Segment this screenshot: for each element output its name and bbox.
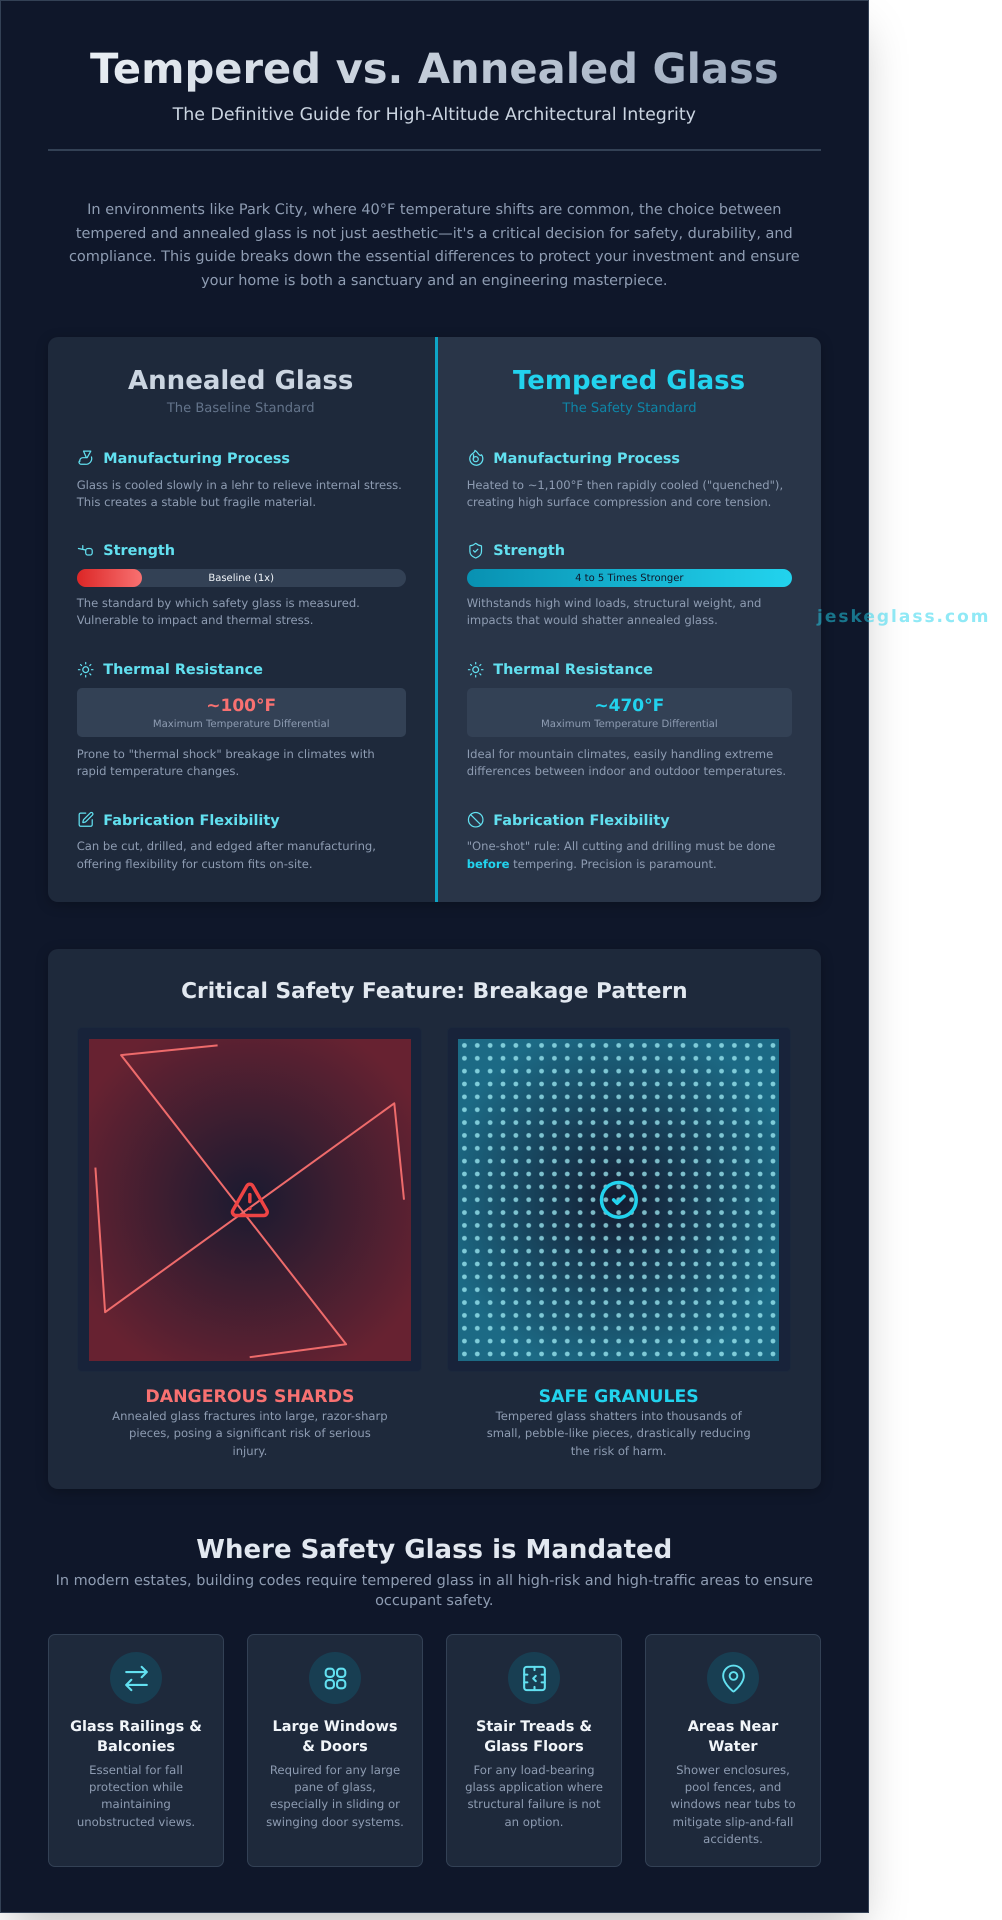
description: [467, 839, 775, 871]
description: differences between indoor and outdoor temperatures.: [467, 764, 786, 778]
strength bar: [467, 569, 792, 587]
card: stairs: [446, 1634, 622, 1867]
icon: edit: [78, 812, 94, 827]
description: safe granules: Tempered glass shatters into thousands of: [496, 1409, 742, 1423]
description: impacts that would shatter annealed glass.: [467, 613, 718, 627]
row: strength: [76, 543, 406, 627]
description: Ideal for mountain climates, easily handling extreme: [467, 747, 773, 761]
icon: scale: [78, 545, 93, 556]
description: safe granules: the risk of harm.: [571, 1444, 667, 1458]
card title: [476, 1719, 592, 1755]
text: mandate intro: occupant safety.: [375, 1593, 494, 1609]
card text: mitigate slip-and-fall: [673, 1815, 793, 1829]
description: [467, 747, 786, 778]
row: thermal resistance: [77, 662, 406, 778]
card text: [77, 1763, 195, 1829]
row: fabrication flexibility: [467, 812, 775, 871]
heading: breakage pattern: Critical Safety Feature: Breakage Pattern: [181, 979, 688, 1004]
subtitle: The Definitive Guide for High-Altitude Architectural Integrity: [173, 105, 696, 125]
card text: Required for any large: [270, 1763, 400, 1777]
card title: Balconies: [97, 1739, 175, 1755]
stat caption: Maximum Temperature Differential: [541, 719, 718, 730]
card text: protection while: [89, 1780, 183, 1794]
description: [467, 596, 761, 627]
icon: ban: [468, 812, 484, 828]
intro paragraph: compliance. This guide breaks down the essential differences to protect your investment and ensure: [69, 249, 800, 265]
description: dangerous shards: pieces, posing a significant risk of serious: [129, 1426, 371, 1440]
card text: unobstructed views.: [77, 1815, 195, 1829]
card text: pane of glass,: [294, 1780, 376, 1794]
caption: dangerous shards: DANGEROUS SHARDS: [145, 1387, 354, 1407]
label: Manufacturing Process: [103, 451, 290, 467]
icon: cooling: [78, 450, 92, 465]
icon: sun: [468, 662, 484, 678]
card text: glass application where: [465, 1780, 603, 1794]
description: dangerous shards: Annealed glass fractures into large, razor-sharp: [112, 1409, 388, 1423]
stat caption: Maximum Temperature Differential: [153, 719, 330, 730]
diagram: dangerous shards: [77, 1027, 422, 1372]
card: railings: [48, 1634, 224, 1867]
panel: comparison: [48, 337, 821, 902]
card text: maintaining: [101, 1797, 171, 1811]
label: Strength: [493, 543, 565, 559]
shard visual: [89, 1039, 411, 1361]
column: tempered glass: [435, 337, 821, 902]
description: safe granules: [487, 1409, 751, 1458]
description: Prone to "thermal shock" breakage in climates with: [77, 747, 375, 761]
subheading: baseline standard: The Baseline Standard: [167, 401, 315, 416]
label: Fabrication Flexibility: [493, 813, 670, 829]
diagram: safe granules: [447, 1027, 791, 1372]
icon: shield check: [469, 542, 482, 558]
icon: sun: [78, 662, 94, 678]
description: rapid temperature changes.: [77, 764, 239, 778]
subheading: safety standard: The Safety Standard: [562, 401, 697, 416]
icon: warning triangle: [230, 1182, 269, 1218]
card: water: [645, 1634, 821, 1867]
description: Heated to ~1,100°F then rapidly cooled ("quenched"),: [467, 478, 783, 492]
dot grid: [462, 1043, 776, 1356]
description: Vulnerable to impact and thermal stress.: [77, 613, 313, 627]
description: [77, 747, 375, 778]
description: Glass is cooled slowly in a lehr to relieve internal stress.: [77, 478, 402, 492]
description: Withstands high wind loads, structural weight, and: [467, 596, 761, 610]
description: [76, 596, 360, 627]
card text: pool fences, and: [685, 1780, 781, 1794]
stat value: ~470°F: [594, 696, 664, 716]
strength bar: [77, 569, 406, 587]
card title: Stair Treads &: [476, 1719, 592, 1735]
caption: safe granules: SAFE GRANULES: [539, 1387, 699, 1407]
description: offering flexibility for custom fits on-site.: [77, 857, 313, 871]
icon: map pin: [707, 1652, 759, 1704]
icon: grid: [309, 1652, 361, 1704]
heading: tempered glass: Tempered Glass: [513, 366, 745, 396]
row: fabrication flexibility: [77, 812, 376, 871]
description: dangerous shards: injury.: [232, 1444, 267, 1458]
description: creating high surface compression and core tension.: [467, 495, 771, 509]
row: manufacturing process: [467, 450, 783, 509]
row: thermal resistance: [467, 662, 792, 778]
column: annealed glass: [48, 337, 435, 902]
description: "One-shot" rule: All cutting and drilling must be done: [467, 839, 775, 853]
text: mandate intro: In modern estates, building codes require tempered glass in all high-risk and high-traffic areas to ensure: [56, 1573, 813, 1589]
description: Can be cut, drilled, and edged after manufacturing,: [77, 839, 376, 853]
label: Thermal Resistance: [103, 662, 263, 678]
bar fill: [77, 569, 142, 587]
intro paragraph: your home is both a sanctuary and an engineering masterpiece.: [201, 273, 668, 289]
intro paragraph: tempered and annealed glass is not just aesthetic—it's a critical decision for safety, durability, and: [76, 226, 793, 242]
stat value: ~100°F: [206, 696, 276, 716]
card title: Glass Floors: [484, 1739, 584, 1755]
panel: breakage pattern: [48, 949, 821, 1489]
icon: arrows: [110, 1652, 162, 1704]
description: [76, 478, 402, 509]
stat box: [77, 688, 406, 737]
row: manufacturing process: [76, 450, 402, 509]
description: dangerous shards: [112, 1409, 388, 1458]
description: This creates a stable but fragile material.: [77, 495, 316, 509]
row: strength: [467, 542, 792, 627]
intro paragraph: In environments like Park City, where 40°F temperature shifts are common, the choice between: [87, 202, 781, 218]
card title: Glass Railings &: [70, 1719, 202, 1735]
granule visual: [458, 1039, 779, 1361]
card title: [70, 1719, 202, 1755]
card text: especially in sliding or: [270, 1797, 400, 1811]
card text: [266, 1763, 404, 1829]
card text: Essential for fall: [89, 1763, 183, 1777]
card title: & Doors: [302, 1739, 368, 1755]
card text: For any load-bearing: [473, 1763, 595, 1777]
text: mandate intro: [56, 1573, 813, 1609]
icon: floor tile: [508, 1652, 560, 1704]
title: Tempered vs. Annealed Glass: [90, 44, 779, 93]
crack lines: [94, 1044, 405, 1358]
heading: where safety glass is mandated: Where Safety Glass is Mandated: [196, 1535, 672, 1565]
intro paragraph: [69, 202, 800, 289]
bar label: Baseline (1x): [208, 573, 274, 584]
description: The standard by which safety glass is measured.: [77, 596, 360, 610]
card title: [688, 1719, 778, 1755]
card text: an option.: [505, 1815, 563, 1829]
label: Thermal Resistance: [493, 662, 653, 678]
card text: swinging door systems.: [266, 1815, 404, 1829]
icon: check circle: [600, 1180, 638, 1219]
label: Fabrication Flexibility: [103, 813, 280, 829]
card title: Areas Near: [688, 1719, 778, 1735]
icon: flame: [469, 450, 484, 466]
label: Manufacturing Process: [493, 451, 680, 467]
card text: [670, 1763, 796, 1846]
heading: annealed glass: Annealed Glass: [128, 366, 353, 396]
watermark: jeskeglass.com: [817, 607, 990, 627]
description: before tempering. Precision is paramount.: [467, 857, 717, 871]
stat box: [467, 688, 792, 737]
description: safe granules: small, pebble-like pieces, drastically reducing: [487, 1426, 751, 1440]
card text: windows near tubs to: [670, 1797, 796, 1811]
card title: Water: [708, 1739, 758, 1755]
card title: [272, 1719, 398, 1755]
card text: [465, 1763, 603, 1829]
card text: Shower enclosures,: [676, 1763, 790, 1777]
card title: Large Windows: [272, 1719, 398, 1735]
label: Strength: [103, 543, 175, 559]
card text: structural failure is not: [467, 1797, 601, 1811]
card text: accidents.: [703, 1832, 763, 1846]
card: windows: [247, 1634, 423, 1867]
description: [467, 478, 783, 509]
description: [77, 839, 376, 871]
bar label: 4 to 5 Times Stronger: [575, 573, 684, 584]
